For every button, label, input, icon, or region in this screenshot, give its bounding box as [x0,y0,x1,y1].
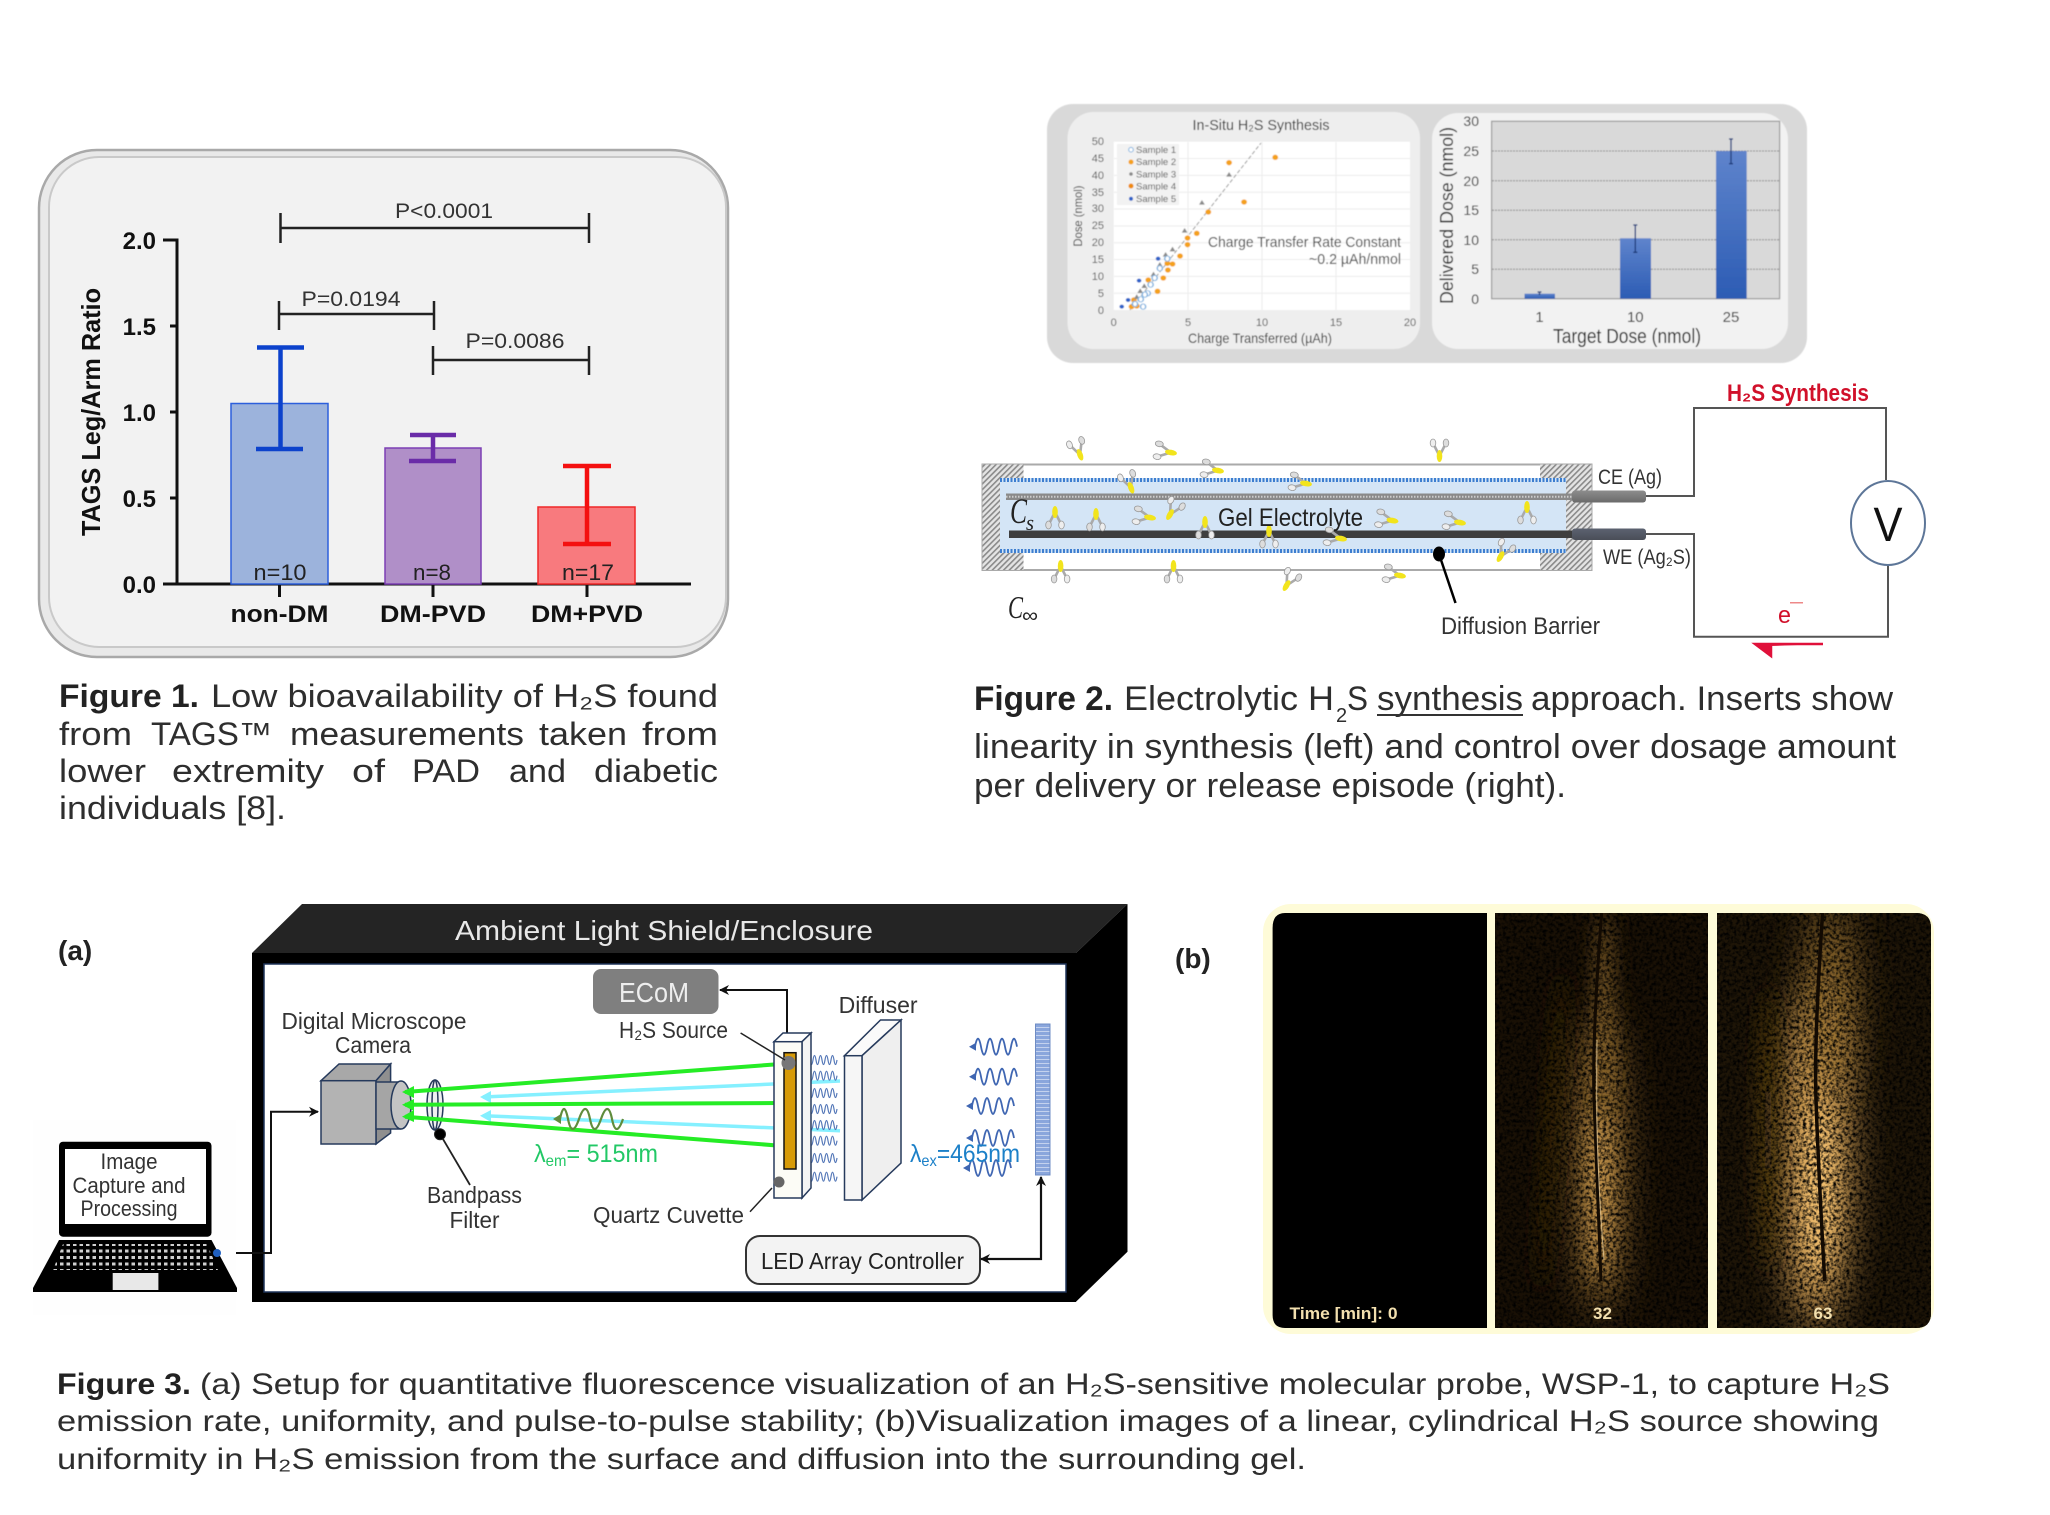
setup labels: Bandpass [427,1182,522,1208]
diagram: fluorescence setup enclosure [221,904,1128,1302]
insert: in-situ synthesis scatter plot: 15 [1330,317,1342,329]
insert: delivered dose bar chart: 0 [1471,291,1479,307]
small wave arrays [807,1056,837,1181]
insert: delivered dose bar chart: 5 [1471,261,1479,277]
diagram labels: WE (Ag₂S) [1603,546,1691,569]
caption: figure 1: of [352,753,385,789]
setup labels [282,992,1020,1233]
voltmeter [1851,481,1925,565]
insert: in-situ synthesis scatter plot: 0 [1111,317,1117,329]
insert: delivered dose bar chart: 10 [1627,309,1644,326]
caption: figure 1: from [59,716,132,752]
setup labels: em [546,1153,566,1170]
LED array [1036,1024,1050,1175]
insert: delivered dose bar chart: 25 [1463,143,1479,159]
arrow: source to ECoM [720,990,787,1050]
y axis labels: 1.0 [123,400,156,427]
ECoM box [593,969,718,1014]
diagram labels: CE (Ag) [1598,466,1662,489]
caption: figure 2: 2 [1336,705,1347,727]
scatter axis numbers: 0 [1098,305,1104,317]
caption: figure 2: Electrolytic H [1124,680,1334,718]
camera [321,1064,411,1144]
scatter axis numbers: 30 [1092,203,1104,215]
scatter axis numbers: 45 [1092,153,1104,165]
insert: in-situ synthesis scatter plot [1068,112,1420,349]
diagram labels: ∞ [1022,605,1038,627]
pointer: diffusion barrier [1433,546,1456,603]
icon: laptop: Capture and [72,1173,186,1198]
insert: delivered dose bar chart: 20 [1463,173,1479,189]
significance brackets: P=0.0194 [302,288,401,311]
insert: in-situ synthesis scatter plot: Dose (nmol) [1071,186,1085,246]
annotation: rate constant [1208,234,1402,268]
caption: figure 1: individuals [8]. [59,790,286,826]
scatter axis numbers: 10 [1092,271,1104,283]
caption: figure 1: Low bioavailability of H₂S found [211,678,718,714]
icon: laptop: Processing [80,1196,178,1221]
scatter legend: Sample 1 [1136,145,1176,156]
insert: in-situ synthesis scatter plot: 20 [1404,317,1416,329]
insert: delivered dose bar chart [1432,113,1788,349]
caption: figure 2 [974,680,1897,805]
y axis labels: 1.5 [123,314,156,341]
image: time 32: 32 [1593,1304,1612,1323]
y axis labels [123,228,156,599]
caption: figure 3 [57,1368,1890,1476]
caption: figure 1: TAGS™ [151,716,272,752]
scatter axis numbers: 40 [1092,170,1104,182]
diagram labels: Gel Electrolyte [1218,504,1363,532]
insert: delivered dose bar chart: 15 [1463,202,1479,218]
icon: laptop: Image [100,1149,158,1174]
diagram labels: Diffusion Barrier [1441,613,1600,640]
scatter axis numbers: 50 [1092,136,1104,148]
caption: figure 2: synthesis [1377,680,1523,718]
panel: visualization images [1263,904,1934,1334]
x axis labels: DM-PVD [380,601,486,628]
insert: in-situ synthesis scatter plot: Charge Transferred (µAh) [1188,330,1332,346]
H2S molecules [1046,436,1536,595]
caption: figure 1: diabetic [594,753,718,789]
scatter legend: Sample 2 [1136,157,1176,168]
caption: figure 3: Figure 3. [57,1368,191,1401]
arrow: camera to laptop link [221,1112,318,1253]
insert: in-situ synthesis scatter plot: 10 [1256,317,1268,329]
insert: in-situ synthesis scatter plot: 5 [1185,317,1191,329]
insert: delivered dose bar chart: 25 [1723,309,1739,326]
excitation waves [963,1039,1017,1176]
significance brackets: P<0.0001 [395,200,493,223]
scatter axis numbers: 5 [1098,288,1104,300]
setup labels: λ [534,1140,546,1168]
setup labels: =465nm [937,1140,1020,1168]
caption: figure 2: S [1347,680,1368,718]
image: time 0 [1273,913,1487,1328]
panel: figure 2 inserts [1047,104,1807,363]
caption: figure 1: PAD [412,753,480,789]
setup labels: ex [921,1153,937,1170]
enclosure box [252,904,1128,1302]
caption: figure 1: from [642,716,718,752]
diffuser [844,1020,901,1200]
circuit wires [1646,408,1888,637]
diagram labels: s [1026,510,1034,535]
setup labels: Camera [335,1032,411,1058]
bar: DM-PVD [385,435,481,585]
x axis labels: non-DM [230,601,328,628]
diagram labels: C [1010,491,1028,531]
scatter legend: Sample 4 [1136,182,1176,192]
y axis title: TAGS Leg/Arm Ratio [76,288,106,536]
significance brackets: P=0.0086 [466,330,564,353]
caption: figure 3: emission rate, uniformity, and pulse-to-pulse stability; (b)Visualization images of a linear, cylindrical H₂S source showing [57,1405,1879,1438]
scatter legend [1117,144,1179,205]
panel: figure 1 bar chart [39,150,728,657]
insert: delivered dose bar chart: 30 [1463,113,1479,129]
image: time 32 [1495,910,1708,1328]
setup labels: Quartz Cuvette [593,1202,744,1228]
y axis labels: 0.5 [123,486,156,513]
pointers [434,1033,785,1212]
scatter legend: Sample 3 [1136,170,1176,180]
bar: non-DM [231,348,328,585]
arrow: controller to LED [981,1177,1041,1259]
emission and excitation rays [402,1064,840,1146]
voltmeter: V [1874,499,1902,552]
enclosure box: Ambient Light Shield/Enclosure [455,915,873,946]
caption: figure 1: extremity [172,753,324,789]
image: time 0: Time [min]: 0 [1290,1304,1398,1323]
insert: delivered dose bar chart: Target Dose (nmol) [1553,326,1701,348]
caption: figure 2: per delivery or release episode (right). [974,767,1566,805]
setup labels: = 515nm [566,1140,658,1168]
caption: figure 1: lower [59,753,146,789]
x axis labels [230,601,643,628]
annotation: rate constant: Charge Transfer Rate Constant [1208,234,1402,251]
diagram labels: e [1778,602,1791,629]
insert: delivered dose bar chart: Delivered Dose (nmol) [1437,127,1457,304]
scatter axis numbers: 15 [1092,254,1104,266]
insert: delivered dose bar chart: 10 [1463,232,1479,248]
LED array controller [746,1236,980,1284]
x axis labels: DM+PVD [531,601,643,628]
bar: DM+PVD: n=17 [562,560,614,585]
scatter legend: Sample 5 [1136,194,1176,205]
caption: figure 3: uniformity in H₂S emission from the surface and diffusion into the surrounding gel. [57,1443,1306,1476]
label: (b): (b) [1175,943,1211,974]
image: time 63 [1717,905,1931,1330]
caption: figure 2: approach. Inserts show [1531,680,1893,718]
setup labels: H₂S Source [619,1017,728,1043]
electrodes [1006,490,1646,540]
quartz cuvette [774,1033,811,1198]
significance brackets [279,200,589,375]
ECoM box: ECoM [619,977,689,1008]
device housing [982,464,1592,570]
y axis labels: 2.0 [123,228,156,255]
arrow: electron flow [1755,644,1823,656]
y axis labels: 0.0 [123,572,156,599]
bar: DM-PVD: n=8 [413,560,451,585]
diagram labels: C [1008,589,1023,625]
bar: DM+PVD [538,466,635,585]
insert: in-situ synthesis scatter plot: In-Situ H₂S Synthesis [1192,117,1330,134]
scatter points [1119,155,1278,309]
caption: figure 1: measurements [290,716,524,752]
scatter axis numbers [1092,136,1104,317]
caption: figure 1: and [509,753,566,789]
scatter axis numbers: 20 [1092,237,1104,249]
diagram labels [1008,380,1869,640]
bar: non-DM: n=10 [254,560,306,585]
caption: figure 2: Figure 2. [974,680,1113,718]
diagram: electrolytic H2S synthesis device [982,380,1925,656]
label: (a): (a) [58,935,92,966]
setup labels: Diffuser [839,992,918,1018]
caption: figure 1 [59,678,718,826]
bandpass filter [427,1080,443,1130]
image: time 63: 63 [1814,1304,1832,1323]
setup labels: Filter [450,1207,500,1233]
setup labels: Digital Microscope [282,1008,466,1034]
annotation: rate constant: ~0.2 µAh/nmol [1309,251,1401,268]
caption: figure 1: taken [539,716,627,752]
scatter axis numbers: 35 [1092,187,1104,199]
icon: laptop [33,1120,237,1315]
caption: figure 1: Figure 1. [59,678,199,714]
scatter axis numbers: 25 [1092,220,1104,232]
caption: figure 2: linearity in synthesis (left) and control over dosage amount [974,728,1897,766]
diagram labels: H₂S Synthesis [1727,380,1869,407]
caption: figure 3: (a) Setup for quantitative fluorescence visualization of an H₂S-sensitive molecular probe, WSP-1, to capture H₂S [200,1368,1890,1401]
y axis and ticks [163,240,691,597]
setup labels: λ [910,1140,922,1168]
insert: delivered dose bar chart: 1 [1535,309,1544,326]
LED array controller: LED Array Controller [761,1248,964,1274]
